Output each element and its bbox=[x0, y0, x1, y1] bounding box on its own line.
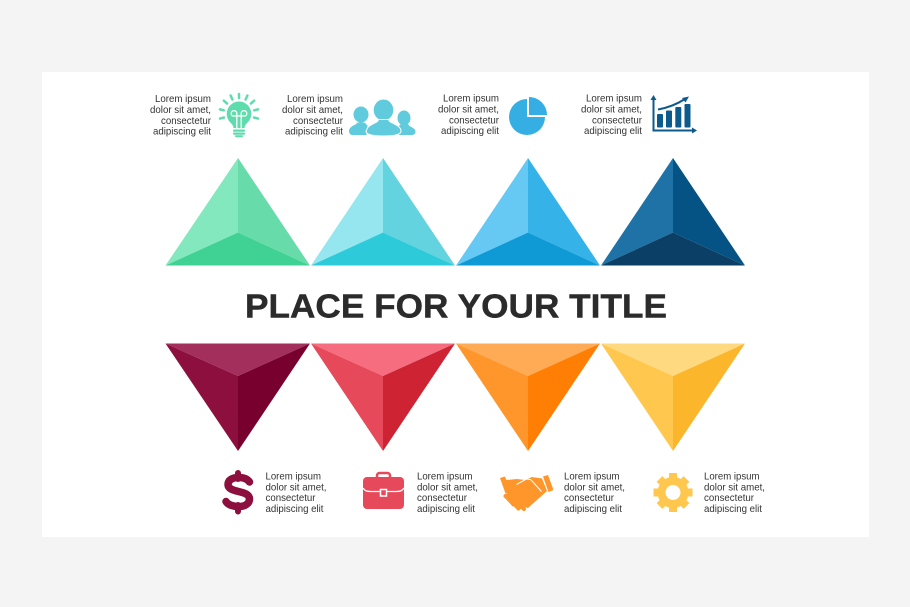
text block: top 2: Lorem ipsum bbox=[287, 94, 343, 105]
triangle: navy bbox=[601, 158, 745, 266]
text block: top 3: Lorem ipsum bbox=[443, 94, 499, 104]
text block: bottom 2 bbox=[417, 472, 478, 515]
text block: bottom 1: consectetur bbox=[266, 493, 316, 504]
text block: bottom 1: Lorem ipsum bbox=[266, 472, 321, 482]
text block: bottom 1: dolor sit amet, bbox=[266, 482, 326, 494]
icon: pie chart bbox=[509, 97, 547, 135]
text block: top 1: adipiscing elit bbox=[153, 126, 211, 138]
text block: top 4 bbox=[581, 94, 642, 137]
triangle: orange bbox=[456, 344, 600, 451]
text block: bottom 1: adipiscing elit bbox=[266, 504, 324, 515]
text block: top 1 bbox=[150, 94, 211, 138]
text block: bottom 1 bbox=[266, 472, 326, 515]
text block: top 4: dolor sit amet, bbox=[581, 104, 642, 116]
text block: top 3: consectetur bbox=[449, 116, 499, 126]
text block: top 4: consectetur bbox=[592, 116, 642, 126]
text block: bottom 2: consectetur bbox=[417, 493, 467, 504]
title: PLACE FOR YOUR TITLE bbox=[245, 288, 667, 326]
text block: top 2: adipiscing elit bbox=[285, 126, 343, 138]
triangle: yellow bbox=[601, 344, 745, 451]
text block: bottom 3: adipiscing elit bbox=[564, 504, 622, 515]
text block: bottom 3: dolor sit amet, bbox=[564, 482, 625, 494]
icon: people bbox=[349, 100, 416, 136]
text block: bottom 2: adipiscing elit bbox=[417, 504, 475, 515]
text block: top 3: adipiscing elit bbox=[441, 126, 499, 137]
triangle: maroon bbox=[166, 344, 310, 451]
text block: bottom 4: consectetur bbox=[704, 493, 754, 504]
white card panel bbox=[42, 72, 869, 537]
text block: bottom 3: consectetur bbox=[564, 493, 614, 504]
text block: top 2: dolor sit amet, bbox=[282, 105, 343, 116]
text block: top 1: consectetur bbox=[161, 116, 211, 127]
text block: bottom 2: Lorem ipsum bbox=[417, 472, 472, 482]
icon: gear bbox=[654, 473, 692, 512]
text block: bottom 3: Lorem ipsum bbox=[564, 472, 620, 482]
icon: light bulb bbox=[220, 94, 258, 137]
text block: top 3: dolor sit amet, bbox=[438, 104, 499, 116]
text block: bottom 4: adipiscing elit bbox=[704, 504, 762, 515]
icon: dollar sign bbox=[226, 473, 250, 512]
triangle: green bbox=[166, 158, 310, 266]
triangle: blue bbox=[456, 158, 600, 266]
text block: bottom 4: dolor sit amet, bbox=[704, 482, 765, 494]
text block: top 2 bbox=[282, 94, 343, 138]
text block: bottom 3 bbox=[564, 472, 625, 515]
text block: bottom 4 bbox=[704, 472, 765, 515]
text block: top 3 bbox=[438, 94, 499, 137]
text block: top 4: Lorem ipsum bbox=[586, 94, 642, 104]
icon: briefcase bbox=[363, 473, 404, 509]
icon: growth chart bbox=[650, 95, 697, 134]
triangle: aqua bbox=[311, 158, 455, 266]
text block: top 1: Lorem ipsum bbox=[155, 94, 211, 105]
text block: bottom 2: dolor sit amet, bbox=[417, 482, 478, 494]
text block: top 4: adipiscing elit bbox=[584, 126, 642, 137]
text block: bottom 4: Lorem ipsum bbox=[704, 472, 760, 482]
triangle: red bbox=[311, 344, 455, 451]
text block: top 2: consectetur bbox=[293, 116, 343, 127]
text block: top 1: dolor sit amet, bbox=[150, 105, 211, 116]
icon: handshake bbox=[500, 475, 554, 509]
